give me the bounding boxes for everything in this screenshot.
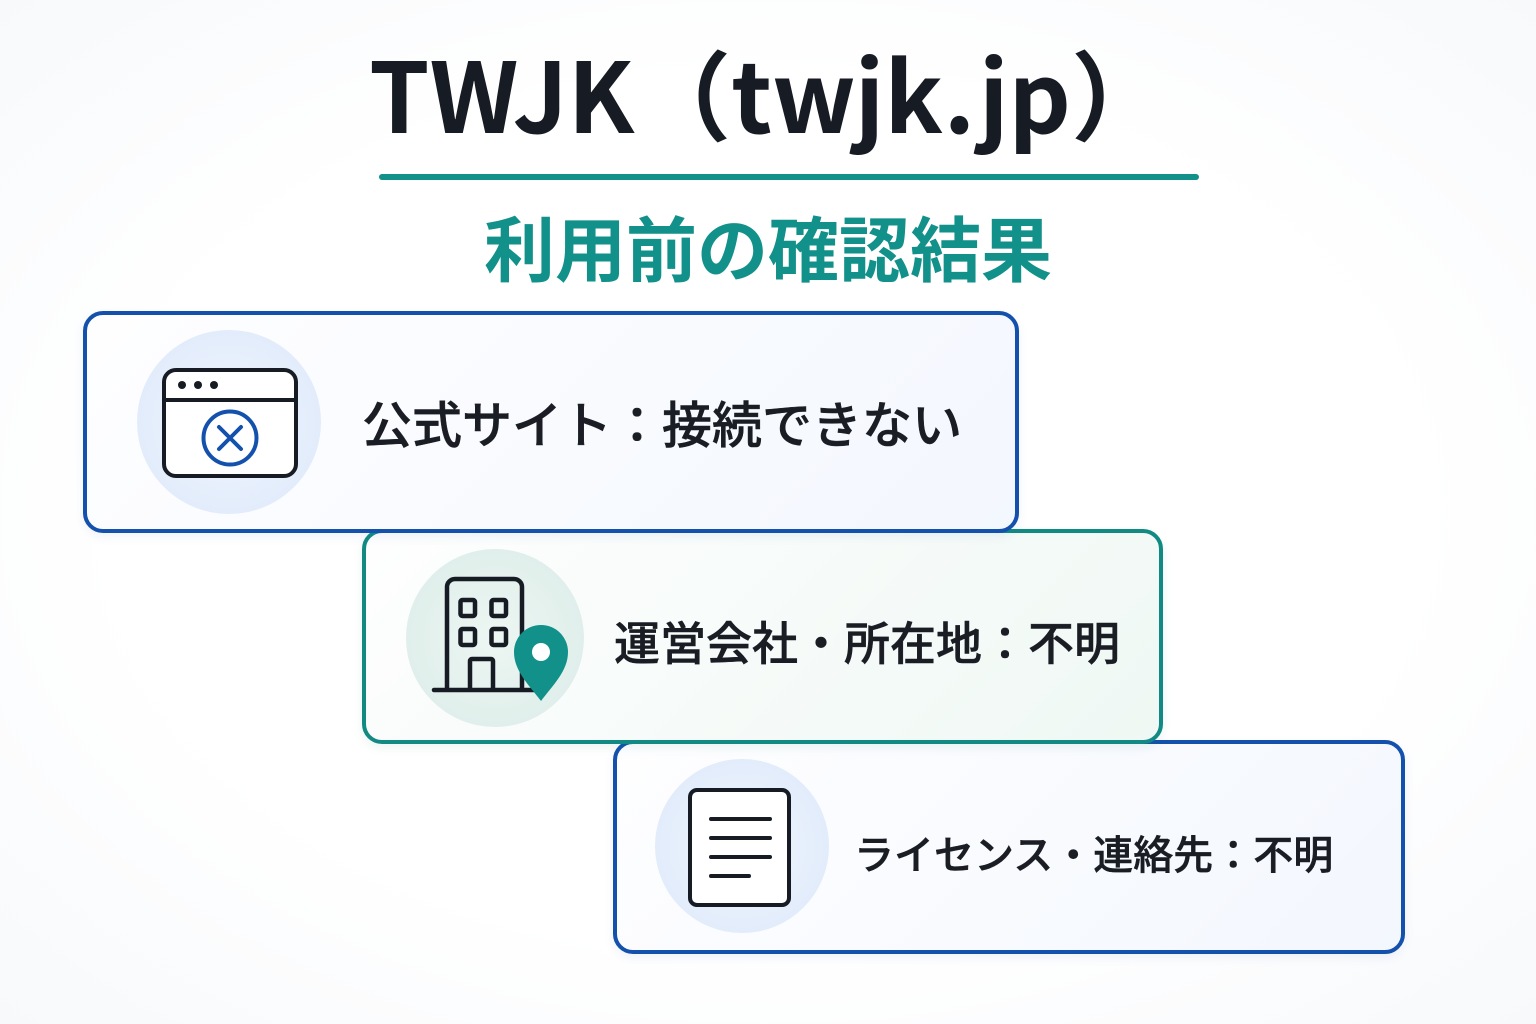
panel: company info — [362, 529, 1163, 744]
title: TWJK（twjk.jp） — [369, 20, 1168, 161]
icon: building with pin — [406, 549, 584, 727]
icon: document — [655, 759, 829, 933]
icon: browser error — [137, 330, 321, 514]
title underline — [379, 174, 1199, 180]
site status text: 公式サイト：接続できない — [362, 386, 962, 458]
panel: license and contact — [613, 740, 1405, 954]
company info text: 運営会社・所在地：不明 — [614, 608, 1120, 674]
subtitle: 利用前の確認結果 — [484, 195, 1052, 297]
panel: site status — [83, 311, 1019, 533]
license text: ライセンス・連絡先：不明 — [854, 823, 1333, 881]
